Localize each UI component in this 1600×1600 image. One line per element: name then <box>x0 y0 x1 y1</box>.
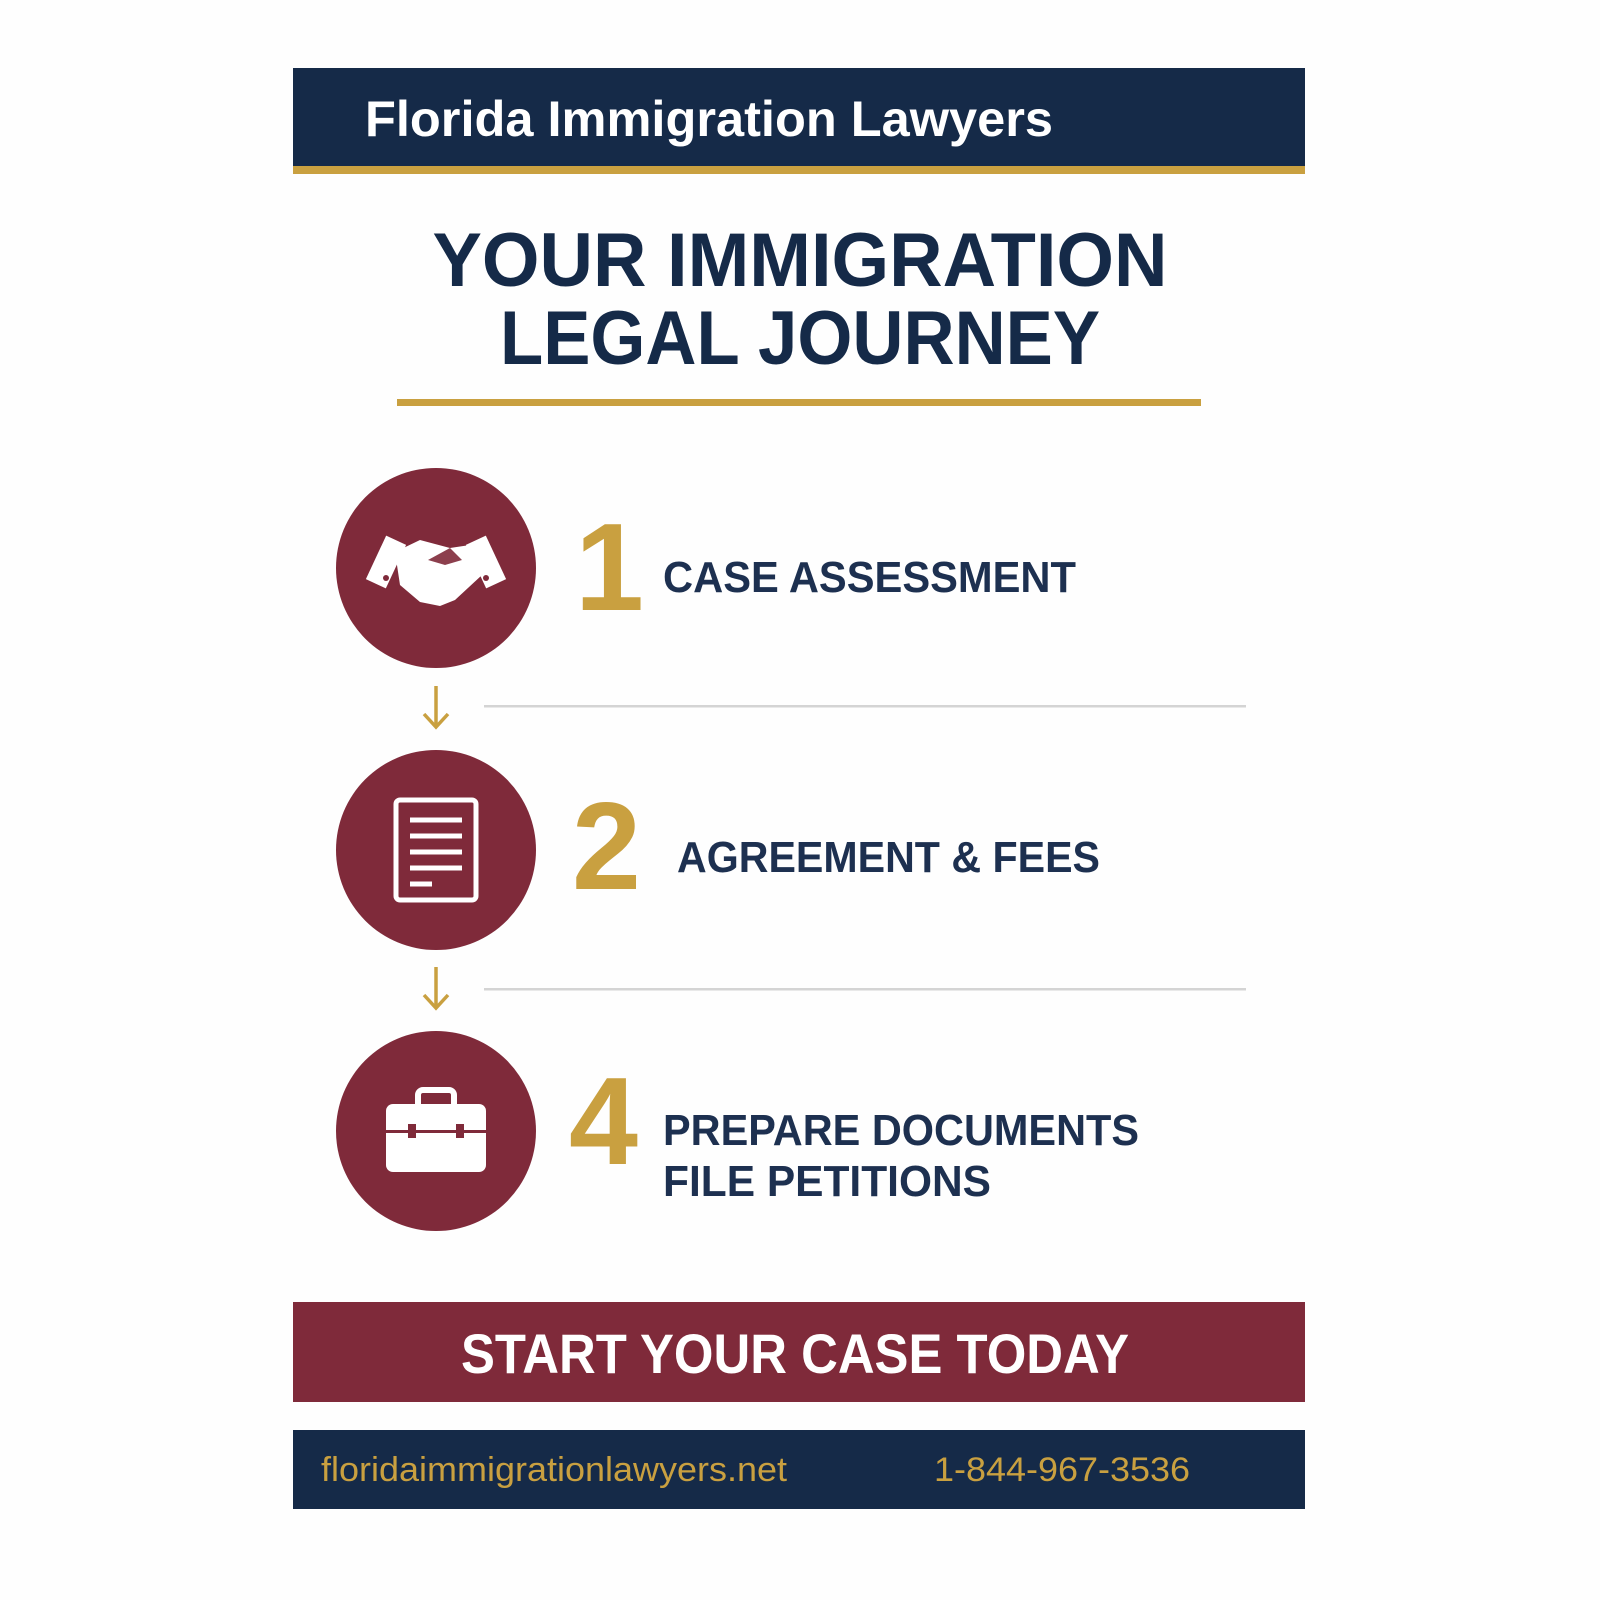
main title <box>432 218 1168 381</box>
icon: briefcase <box>336 1031 536 1231</box>
CTA banner <box>293 1302 1305 1402</box>
footer <box>293 1430 1305 1509</box>
number 1: 1 <box>575 499 644 637</box>
step 4 <box>336 1031 1139 1231</box>
step 2 <box>336 750 1100 950</box>
footer: floridaimmigrationlawyers.net <box>321 1451 788 1489</box>
label: CASE ASSESSMENT <box>663 553 1076 602</box>
CTA banner: START YOUR CASE TODAY <box>461 1322 1129 1385</box>
icon: handshake <box>336 468 536 668</box>
header title: Florida Immigration Lawyers <box>365 91 1053 147</box>
header bar <box>293 68 1305 174</box>
main title: LEGAL JOURNEY <box>500 296 1100 381</box>
arrow 2 <box>424 967 448 1008</box>
title underline <box>397 399 1201 406</box>
step 4: FILE PETITIONS <box>663 1157 991 1206</box>
number 4: 4 <box>569 1053 638 1191</box>
number 2: 2 <box>572 778 641 916</box>
footer: 1-844-967-3536 <box>934 1451 1190 1489</box>
step 1 <box>336 468 1076 668</box>
icon: document <box>336 750 536 950</box>
label: PREPARE DOCUMENTS <box>663 1106 1139 1155</box>
label: AGREEMENT & FEES <box>677 833 1100 882</box>
arrow 1 <box>424 686 448 727</box>
main title: YOUR IMMIGRATION <box>432 218 1168 303</box>
